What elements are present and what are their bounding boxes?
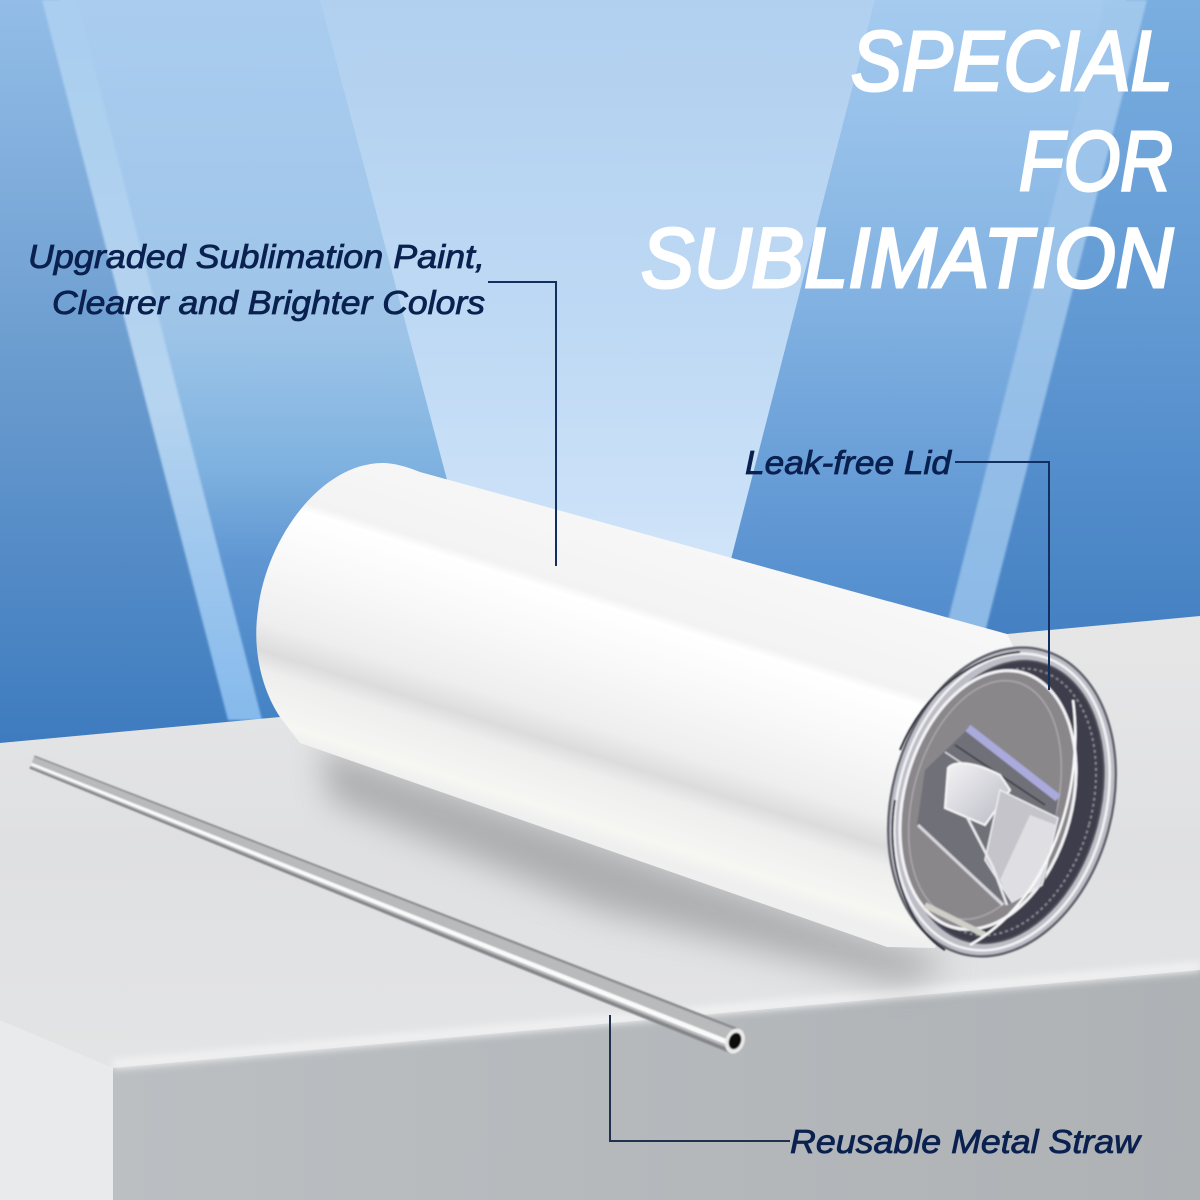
background: blue studio wall with light beams: [0, 0, 1200, 800]
callout: upgraded sublimation paint: Upgraded Sublimation Paint,: [28, 238, 485, 275]
platform: white box the tumbler rests on: [0, 616, 1200, 1200]
callout: reusable metal straw: Reusable Metal Straw: [790, 1123, 1142, 1160]
title: special for sublimation: [641, 14, 1173, 305]
metal straw: [29, 756, 748, 1056]
callout: upgraded sublimation paint: Clearer and Brighter Colors: [52, 284, 485, 321]
title: special for sublimation: FOR: [1019, 114, 1173, 208]
callout: upgraded sublimation paint: [28, 238, 485, 321]
callout: leak-free lid: Leak-free Lid: [745, 444, 953, 481]
clear leak-free lid with slider: [855, 622, 1149, 982]
leader line: lid callout: [955, 462, 1049, 690]
leader line: paint callout: [488, 282, 556, 566]
title: special for sublimation: SUBLIMATION: [641, 211, 1173, 305]
tumbler body: [256, 463, 1040, 948]
leader line: straw callout: [610, 1015, 790, 1141]
title: special for sublimation: SPECIAL: [851, 14, 1173, 108]
